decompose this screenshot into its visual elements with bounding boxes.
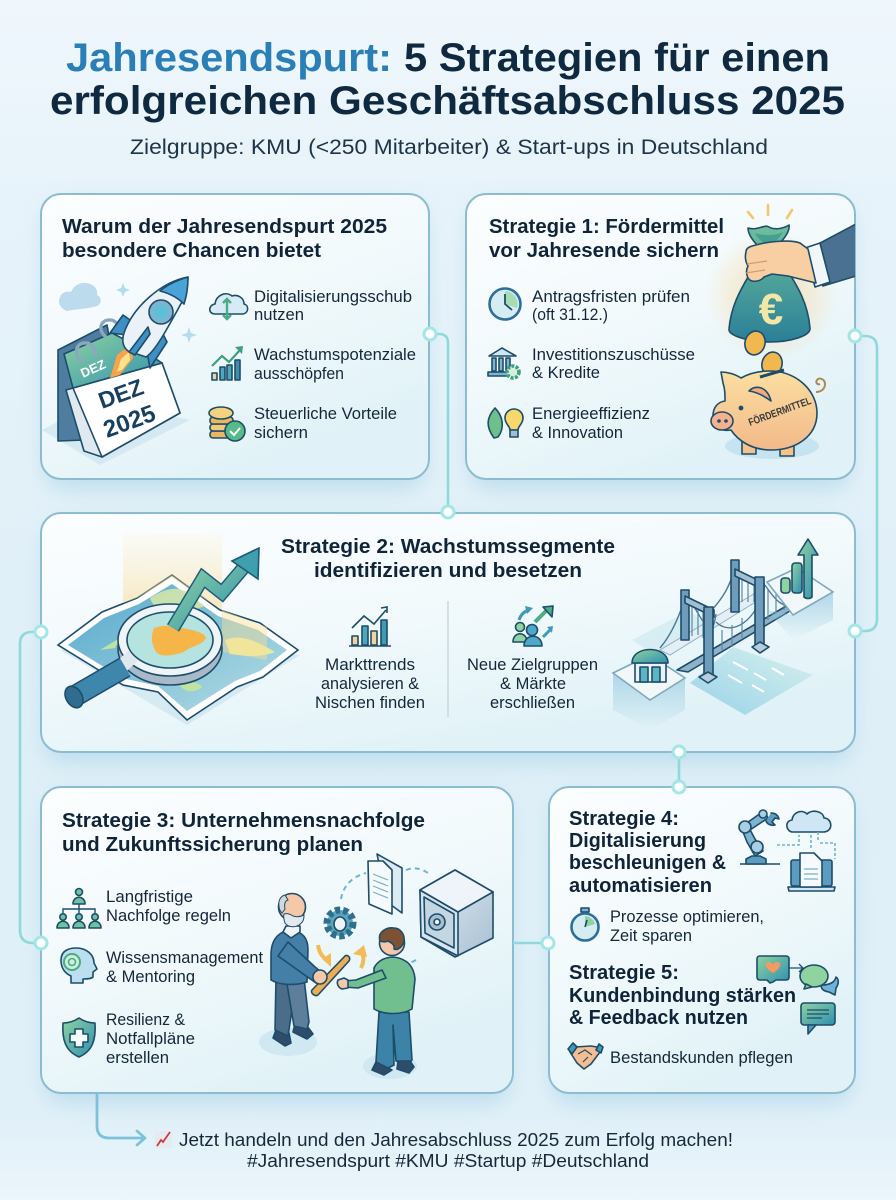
subtitle: Zielgruppe: KMU (<250 Mitarbeiter) & Start-ups in Deutschland <box>130 136 768 159</box>
illustration: bridge <box>613 539 833 730</box>
item: markttrends: Markttrends <box>325 656 415 674</box>
item: resilienz <box>63 1011 195 1067</box>
heading: strategie 5 <box>569 962 796 1029</box>
heading: strategie 5: & Feedback nutzen <box>569 1007 748 1029</box>
heading: warum: besondere Chancen bietet <box>62 240 321 262</box>
item: nachfolge <box>57 888 231 928</box>
connector: strategie 1 to strategie 2 <box>849 330 877 637</box>
illustration: succession handover <box>259 854 493 1079</box>
connector: warum to strategie 2 <box>424 328 454 518</box>
illustration: calendar and rocket <box>42 277 197 465</box>
item: investitionszuschüsse <box>488 346 695 382</box>
item: steuerliche vorteile: sichern <box>254 424 308 442</box>
icon: chart emoji <box>155 1131 172 1148</box>
panel: strategie 2 <box>41 513 855 752</box>
heading: strategie 4: beschleunigen & <box>569 852 726 874</box>
item: wissensmanagement: Wissensmanagement <box>106 949 263 967</box>
heading: strategie 3: Strategie 3: Unternehmensnachfolge <box>62 810 425 832</box>
title: 5 Strategien für einen <box>404 36 830 80</box>
illustration: calendar and rocket: 2025 <box>100 400 159 444</box>
illustration: map with magnifier <box>58 533 300 725</box>
item: prozesse: Zeit sparen <box>610 927 692 945</box>
title <box>50 36 845 123</box>
item: prozesse <box>572 908 764 945</box>
heading: strategie 3: und Zukunftssicherung planen <box>62 834 363 856</box>
call to action: Jetzt handeln und den Jahresabschluss 2025 zum Erfolg machen! <box>179 1130 733 1150</box>
connector: strategie 2 to strategie 3 <box>20 626 47 949</box>
item: digitalisierungsschub: nutzen <box>254 306 304 324</box>
heading: strategie 4 <box>569 808 726 897</box>
heading: strategie 2: identifizieren und besetzen <box>314 560 582 582</box>
panel: strategie 1 <box>466 194 856 479</box>
item: neue zielgruppen: Neue Zielgruppen <box>467 656 598 674</box>
heading: strategie 1 <box>489 216 724 262</box>
illustration: feedback bubbles <box>757 956 838 1034</box>
item: wissensmanagement: & Mentoring <box>106 968 195 986</box>
illustration: money bag and piggy bank: FÖRDERMITTEL <box>747 394 813 429</box>
heading: strategie 2: Strategie 2: Wachstumssegmente <box>281 536 615 558</box>
arrow: to call to action <box>97 1094 145 1145</box>
hashtags: #Jahresendspurt #KMU #Startup #Deutschland <box>247 1151 649 1171</box>
heading: strategie 4: automatisieren <box>569 875 712 897</box>
item: digitalisierungsschub: Digitalisierungsschub <box>254 288 412 306</box>
illustration: money bag and piggy bank <box>706 205 856 459</box>
heading: warum <box>62 216 387 262</box>
illustration: calendar and rocket: DEZ <box>78 356 108 381</box>
item: steuerliche vorteile: Steuerliche Vorteile <box>254 405 397 423</box>
heading: strategie 5: Strategie 5: <box>569 962 679 984</box>
item: digitalisierungsschub <box>210 288 412 324</box>
item: wissensmanagement <box>61 948 263 986</box>
panel: warum <box>41 194 429 479</box>
heading: strategie 3 <box>62 810 425 856</box>
heading: strategie 1: Strategie 1: Fördermittel <box>489 216 724 238</box>
illustration: calendar and rocket: DEZ <box>95 374 147 414</box>
item: prozesse: Prozesse optimieren, <box>610 908 764 926</box>
item: wachstumspotenziale: ausschöpfen <box>254 365 344 383</box>
item: investitionszuschüsse: & Kredite <box>532 364 600 382</box>
title: Jahresendspurt: <box>66 36 392 80</box>
heading: strategie 2 <box>281 536 615 582</box>
item: markttrends: Nischen finden <box>315 694 425 712</box>
connector: strategie 3 to strategie 4 <box>513 937 554 949</box>
item: energieeffizienz: & Innovation <box>532 424 623 442</box>
item: neue zielgruppen: erschließen <box>490 694 575 712</box>
item: bestandskunden: Bestandskunden pflegen <box>610 1049 793 1067</box>
divider <box>447 601 449 717</box>
heading: warum: Warum der Jahresendspurt 2025 <box>62 216 387 238</box>
item: neue zielgruppen <box>467 606 598 712</box>
heading: strategie 4: Digitalisierung <box>569 830 706 852</box>
item: energieeffizienz <box>488 405 650 442</box>
item: wachstumspotenziale: Wachstumspotenziale <box>254 346 416 364</box>
item: bestandskunden <box>568 1043 793 1069</box>
item: antragsfristen: Antragsfristen prüfen <box>532 288 690 306</box>
heading: strategie 1: vor Jahresende sichern <box>489 240 719 262</box>
item: markttrends: analysieren & <box>321 675 419 693</box>
item: antragsfristen <box>490 288 690 324</box>
item: investitionszuschüsse: Investitionszuschüsse <box>532 346 695 364</box>
panel: strategie 4 und 5 <box>549 787 855 1093</box>
item: antragsfristen: (oft 31.12.) <box>532 306 608 324</box>
item: resilienz: erstellen <box>106 1049 169 1067</box>
item: energieeffizienz: Energieeffizienz <box>532 405 650 423</box>
connector: strategie 2 to strategie 4 <box>673 746 685 793</box>
illustration: money bag and piggy bank: € <box>759 285 783 334</box>
item: nachfolge: Langfristige <box>106 888 193 906</box>
heading: strategie 4: Strategie 4: <box>569 808 679 830</box>
item: nachfolge: Nachfolge regeln <box>106 907 231 925</box>
heading: strategie 5: Kundenbindung stärken <box>569 985 796 1007</box>
panel shadows <box>45 204 851 1103</box>
panel: strategie 3 <box>41 787 513 1093</box>
title: erfolgreichen Geschäftsabschluss 2025 <box>50 79 845 123</box>
item: steuerliche vorteile <box>209 405 397 442</box>
illustration: robot arm, cloud, laptop <box>739 810 835 891</box>
item: markttrends <box>315 607 425 712</box>
item: wachstumspotenziale <box>212 346 416 383</box>
item: neue zielgruppen: & Märkte <box>500 675 566 693</box>
item: resilienz: Resilienz & <box>106 1011 185 1029</box>
item: resilienz: Notfallpläne <box>106 1030 195 1048</box>
